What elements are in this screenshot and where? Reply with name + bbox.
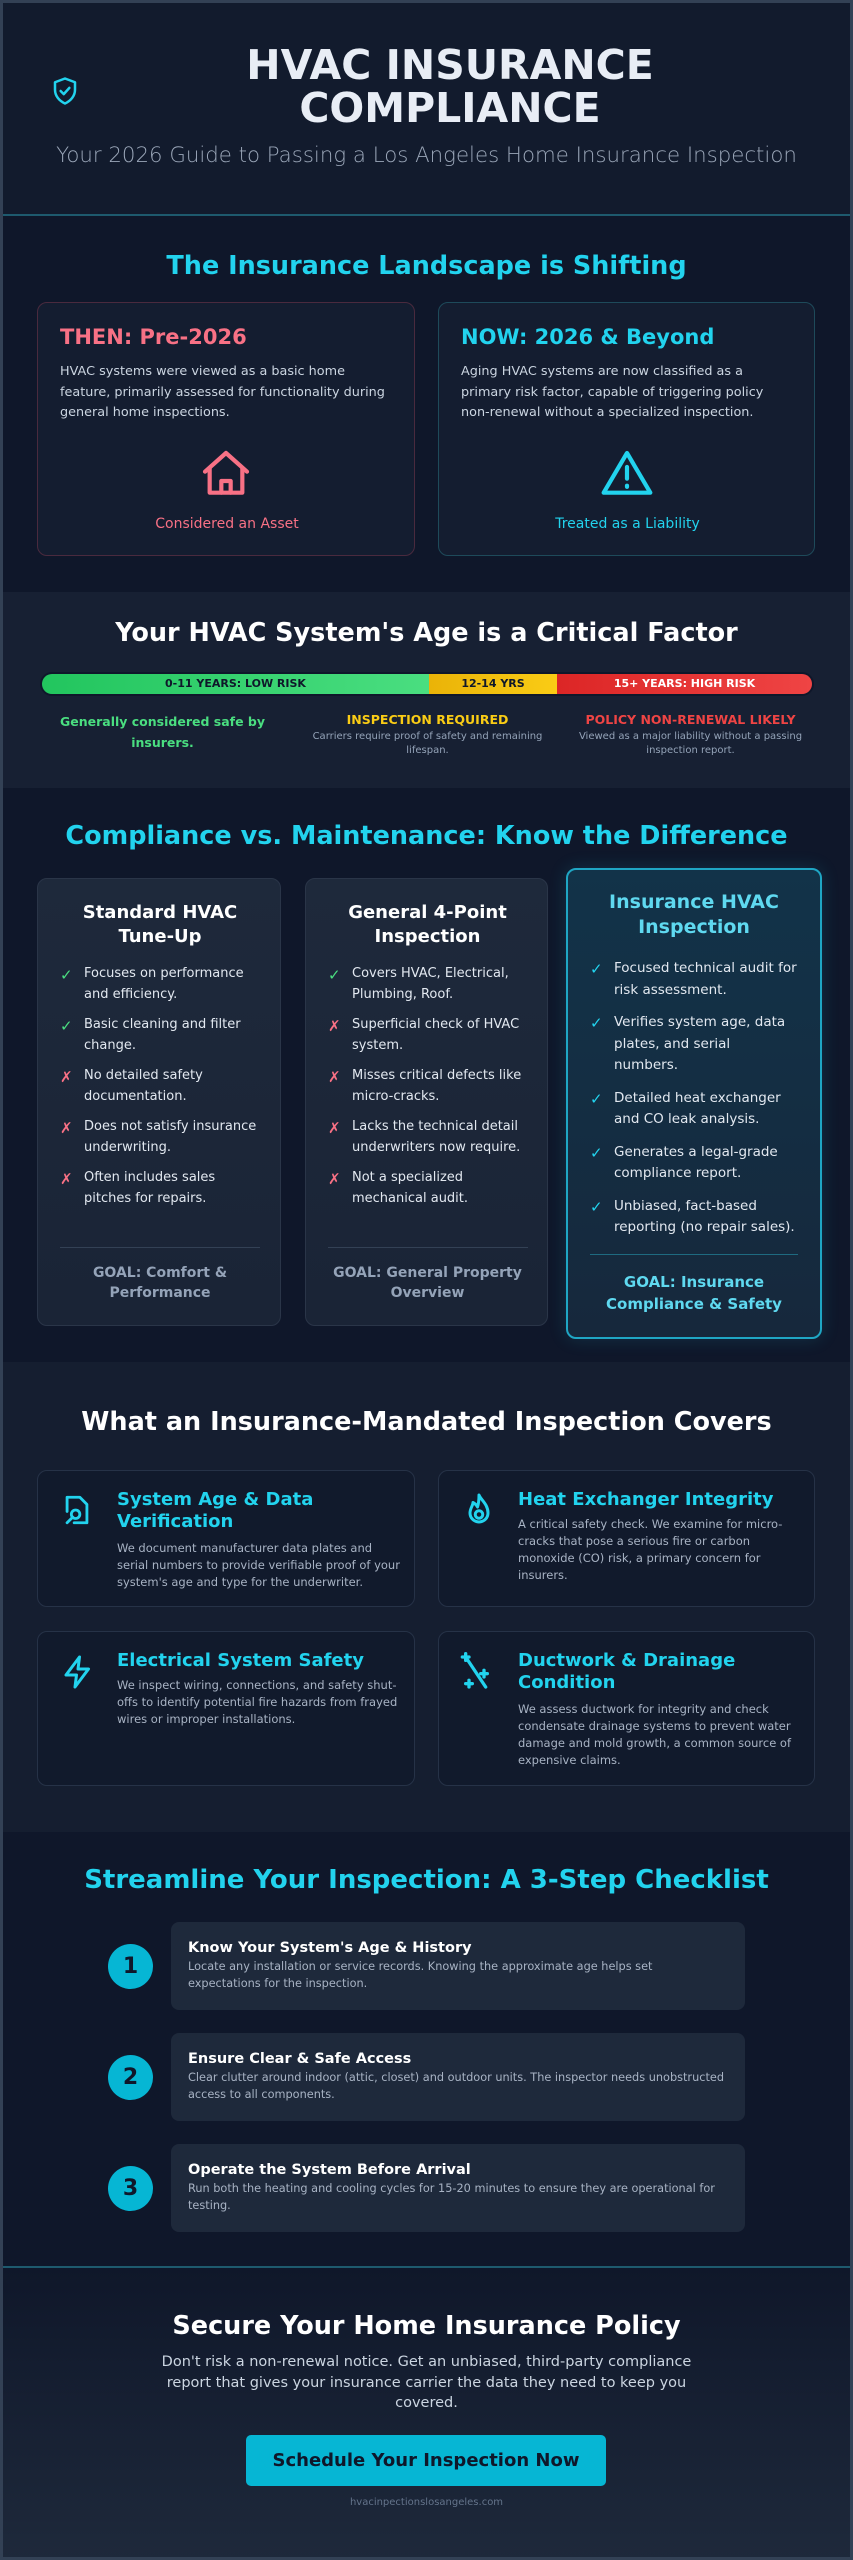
- panel: system age: System Age & Data: [117, 1489, 313, 1510]
- icon: file search: [66, 1496, 88, 1524]
- panel: 4-point: ✗: [328, 1119, 341, 1137]
- section: checklist: [0, 1832, 853, 2268]
- panel: insurance inspection: Detailed heat exchanger and CO leak analysis.: [614, 1090, 781, 1127]
- panel: tune-up: ✗: [60, 1119, 73, 1137]
- step 3: Operate the System Before Arrival: [188, 2162, 471, 2178]
- age bar: 15+ YEARS: HIGH RISK: [614, 677, 755, 690]
- panel: 4-point: ✗: [328, 1017, 341, 1035]
- text: Don't risk a non-renewal notice. Get an unbiased, third-party compliance report that gives your insurance carrier the data they need to keep you covered.: [162, 2354, 691, 2411]
- panel: heat exchanger: Heat Exchanger Integrity: [518, 1489, 773, 1510]
- panel: insurance inspection: Focused technical audit for risk assessment.: [614, 960, 797, 998]
- panel: 4-point: Lacks the technical detail underwriters now require.: [352, 1119, 520, 1154]
- section: age: [0, 592, 853, 788]
- step 3: [108, 2144, 745, 2232]
- panel: tune-up: Basic cleaning and filter change.: [84, 1017, 241, 1052]
- panel: system age: [37, 1470, 415, 1607]
- panel: system age: Verification: [117, 1511, 233, 1532]
- panel: electrical: Electrical System Safety: [117, 1650, 364, 1671]
- heading: Streamline Your Inspection: A 3-Step Checklist: [84, 1865, 769, 1895]
- step 2: 2: [123, 2065, 138, 2090]
- panel: tune-up: Performance: [109, 1285, 211, 1301]
- header: [0, 0, 853, 216]
- panel: now: primary risk factor, capable of triggering policy: [461, 384, 763, 400]
- step 1: 1: [123, 1954, 138, 1979]
- panel: 4-point: Misses critical defects like micro-cracks.: [352, 1068, 521, 1104]
- panel: now: Treated as a Liability: [555, 516, 700, 532]
- panel: 4-point: General 4-Point: [348, 902, 507, 923]
- panel: 4-point: Not a specialized: [352, 1170, 463, 1185]
- panel: 4-point: Overview: [391, 1285, 464, 1301]
- panel: 4-point: mechanical audit.: [352, 1190, 468, 1206]
- panel: insurance inspection: ✓: [590, 960, 603, 978]
- panel: ductwork: [438, 1631, 815, 1786]
- label: high: POLICY NON-RENEWAL LIKELY: [585, 712, 796, 727]
- step 3: 3: [123, 2176, 138, 2201]
- panel: tune-up: Standard HVAC: [83, 902, 237, 923]
- panel: 4-point: ✗: [328, 1170, 341, 1188]
- panel: tune-up: No detailed safety documentation.: [84, 1068, 203, 1104]
- panel: insurance inspection: ✓: [590, 1144, 603, 1162]
- panel: ductwork: Condition: [518, 1672, 615, 1693]
- panel: tune-up: ✓: [60, 966, 73, 984]
- step 2: Ensure Clear & Safe Access: [188, 2051, 411, 2067]
- panel: ductwork: We assess ductwork for integrity and check condensate drainage systems to prevent water damage and mold growth, a common source of expensive claims.: [518, 1702, 791, 1767]
- panel: then: feature, primarily assessed for functionality during: [60, 384, 385, 400]
- panel: insurance inspection: Insurance HVAC: [609, 891, 779, 913]
- panel: 4-point: GOAL: General Property: [333, 1265, 522, 1281]
- panel: now: Aging HVAC systems are now classified as a: [461, 364, 743, 379]
- section: what inspection covers: [0, 1362, 853, 1832]
- panel: tune-up: GOAL: Comfort &: [93, 1265, 227, 1281]
- panel: tune-up: ✗: [60, 1170, 73, 1188]
- heading: Compliance vs. Maintenance: Know the Difference: [65, 821, 788, 851]
- panel: tune-up: ✗: [60, 1068, 73, 1086]
- step 2: Clear clutter around indoor (attic, closet) and outdoor units. The inspector needs unobstructed access to all components.: [188, 2071, 724, 2101]
- panel: insurance inspection: numbers.: [614, 1057, 678, 1073]
- icon: sparkles wand: [460, 1652, 489, 1689]
- step 1: Locate any installation or service records. Knowing the approximate age helps set expectations for the inspection.: [188, 1960, 652, 1990]
- panel: insurance inspection: Inspection: [638, 916, 750, 938]
- icon: flame: [468, 1494, 490, 1524]
- section: compliance vs maintenance: [0, 788, 853, 1362]
- panel: tune-up: ✓: [60, 1017, 73, 1035]
- icon: house: [202, 450, 250, 495]
- heading: What an Insurance-Mandated Inspection Covers: [81, 1407, 772, 1437]
- panel: insurance inspection: Compliance & Safety: [606, 1295, 782, 1313]
- panel: then: THEN: Pre-2026: [60, 325, 247, 349]
- panel: electrical: We inspect wiring, connections, and safety shut-offs to identify potential fire hazards from frayed wires or improper installations.: [117, 1678, 397, 1726]
- title: HVAC INSURANCE: [246, 41, 654, 89]
- panel: 4-point: ✓: [328, 966, 341, 984]
- heading: Your HVAC System's Age is a Critical Factor: [115, 618, 738, 648]
- step 1: [108, 1922, 745, 2010]
- panel: insurance inspection: Unbiased, fact-based reporting (no repair sales).: [614, 1198, 795, 1235]
- title: COMPLIANCE: [299, 84, 601, 132]
- panel: then: [37, 302, 415, 556]
- panel: insurance inspection: [566, 868, 822, 1339]
- panel: 4-point: ✗: [328, 1068, 341, 1086]
- label: inspection: [313, 712, 542, 756]
- section: insurance landscape: [0, 216, 853, 592]
- panel: now: [438, 302, 815, 556]
- panel: heat exchanger: [438, 1470, 815, 1607]
- panel: 4-point: [305, 878, 548, 1326]
- panel: 4-point: Superficial check of HVAC system.: [352, 1017, 519, 1052]
- panel: insurance inspection: Verifies system age, data plates, and serial: [614, 1014, 785, 1052]
- panel: insurance inspection: ✓: [590, 1090, 603, 1108]
- panel: insurance inspection: Generates a legal-grade compliance report.: [614, 1144, 778, 1181]
- panel: tune-up: Does not satisfy insurance underwriting.: [84, 1119, 256, 1154]
- label: inspection: Carriers require proof of safety and remaining lifespan.: [313, 731, 542, 756]
- website: hvacinpectionslosangeles.com: [350, 2497, 503, 2508]
- icon: bolt: [64, 1656, 90, 1688]
- panel: then: general home inspections.: [60, 405, 230, 420]
- section: call to action: [0, 2268, 853, 2560]
- button: Schedule Your Inspection Now: [272, 2450, 579, 2471]
- panel: electrical: [37, 1631, 415, 1786]
- panel: insurance inspection: ✓: [590, 1014, 603, 1032]
- button: [246, 2435, 606, 2486]
- icon: warning: [602, 450, 652, 495]
- panel: heat exchanger: A critical safety check. We examine for micro-cracks that pose a serious fire or carbon monoxide (CO) risk, a primary concern for insurers.: [518, 1517, 782, 1582]
- subtitle: Your 2026 Guide to Passing a Los Angeles Home Insurance Inspection: [56, 143, 797, 168]
- panel: tune-up: Often includes sales pitches for repairs.: [84, 1170, 215, 1206]
- panel: 4-point: Inspection: [375, 926, 480, 947]
- label: inspection: INSPECTION REQUIRED: [347, 712, 508, 727]
- label: low: Generally considered safe by insurers.: [60, 714, 265, 750]
- icon: shield: [54, 77, 76, 105]
- label: high: [579, 712, 802, 756]
- panel: now: non-renewal without a specialized inspection.: [461, 405, 753, 420]
- panel: then: HVAC systems were viewed as a basic home: [60, 364, 345, 379]
- age bar: 12-14 YRS: [461, 677, 525, 690]
- panel: system age: We document manufacturer data plates and serial numbers to provide verifiable proof of your system's age and type for the underwriter.: [117, 1541, 400, 1589]
- step 3: Run both the heating and cooling cycles for 15-20 minutes to ensure they are operational for testing.: [188, 2182, 715, 2212]
- panel: ductwork: Ductwork & Drainage: [518, 1650, 735, 1671]
- step 1: Know Your System's Age & History: [188, 1940, 472, 1956]
- age bar: 0-11 YEARS: LOW RISK: [165, 677, 306, 690]
- panel: tune-up: [37, 878, 281, 1326]
- panel: 4-point: Covers HVAC, Electrical, Plumbing, Roof.: [352, 966, 509, 1002]
- panel: tune-up: Focuses on performance and efficiency.: [84, 966, 244, 1002]
- panel: insurance inspection: ✓: [590, 1198, 603, 1216]
- panel: tune-up: Tune-Up: [118, 926, 202, 947]
- panel: insurance inspection: GOAL: Insurance: [624, 1273, 764, 1291]
- heading: The Insurance Landscape is Shifting: [166, 251, 687, 281]
- panel: now: NOW: 2026 & Beyond: [461, 325, 714, 349]
- title: [246, 41, 654, 132]
- heading: Secure Your Home Insurance Policy: [172, 2311, 681, 2341]
- age bar: [40, 672, 814, 696]
- step 2: [108, 2033, 745, 2121]
- panel: then: Considered an Asset: [155, 516, 299, 532]
- label: high: Viewed as a major liability without a passing inspection report.: [579, 731, 802, 756]
